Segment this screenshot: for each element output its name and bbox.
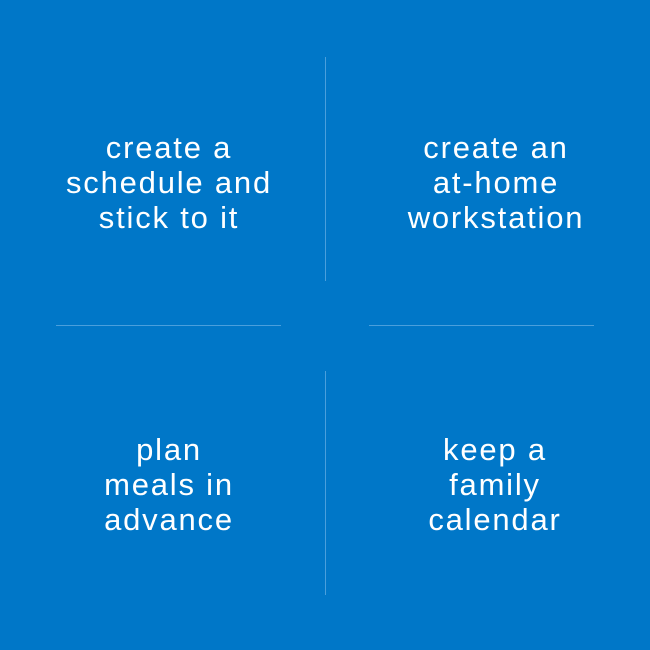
text block: family calendar: keep a: [443, 432, 547, 467]
text block: at-home workstation: at-home: [433, 165, 559, 200]
text block: create a schedule: schedule and: [66, 165, 272, 200]
divider: vertical top: [325, 57, 326, 281]
text block: plan meals: advance: [104, 502, 234, 537]
text block: family calendar: calendar: [428, 502, 562, 537]
text block: family calendar: [428, 432, 562, 537]
text block: at-home workstation: [408, 130, 584, 235]
divider: vertical bottom: [325, 371, 326, 595]
divider: horizontal left: [56, 325, 281, 326]
text block: at-home workstation: create an: [423, 130, 569, 165]
divider: horizontal right: [369, 325, 594, 326]
text block: plan meals: meals in: [104, 467, 234, 502]
text block: plan meals: plan: [136, 432, 202, 467]
text block: family calendar: family: [449, 467, 541, 502]
text block: create a schedule: [66, 130, 272, 235]
text block: create a schedule: create a: [106, 130, 232, 165]
text block: at-home workstation: workstation: [408, 200, 584, 235]
text block: create a schedule: stick to it: [99, 200, 239, 235]
text block: plan meals: [104, 432, 234, 537]
